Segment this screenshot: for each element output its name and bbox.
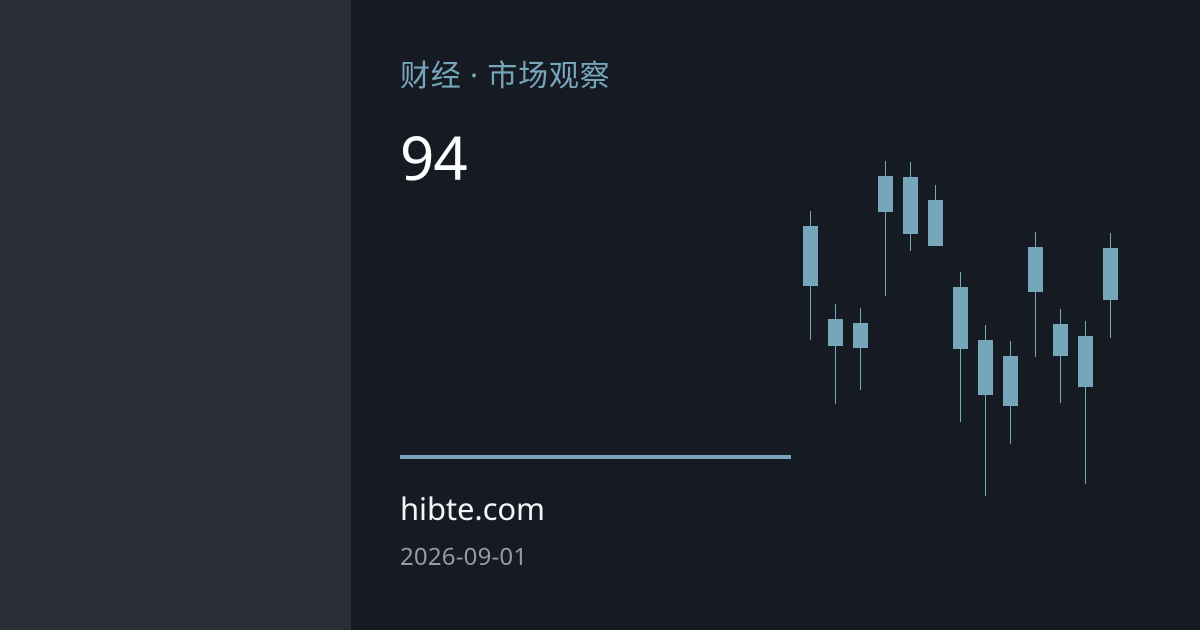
panel: left sidebar: [0, 0, 351, 630]
accent divider: [400, 455, 791, 459]
category heading: 财经 · 市场观察: [400, 54, 610, 95]
site name: hibte.com: [400, 488, 545, 530]
headline number: 94: [400, 116, 467, 198]
date: 2026-09-01: [400, 540, 527, 573]
